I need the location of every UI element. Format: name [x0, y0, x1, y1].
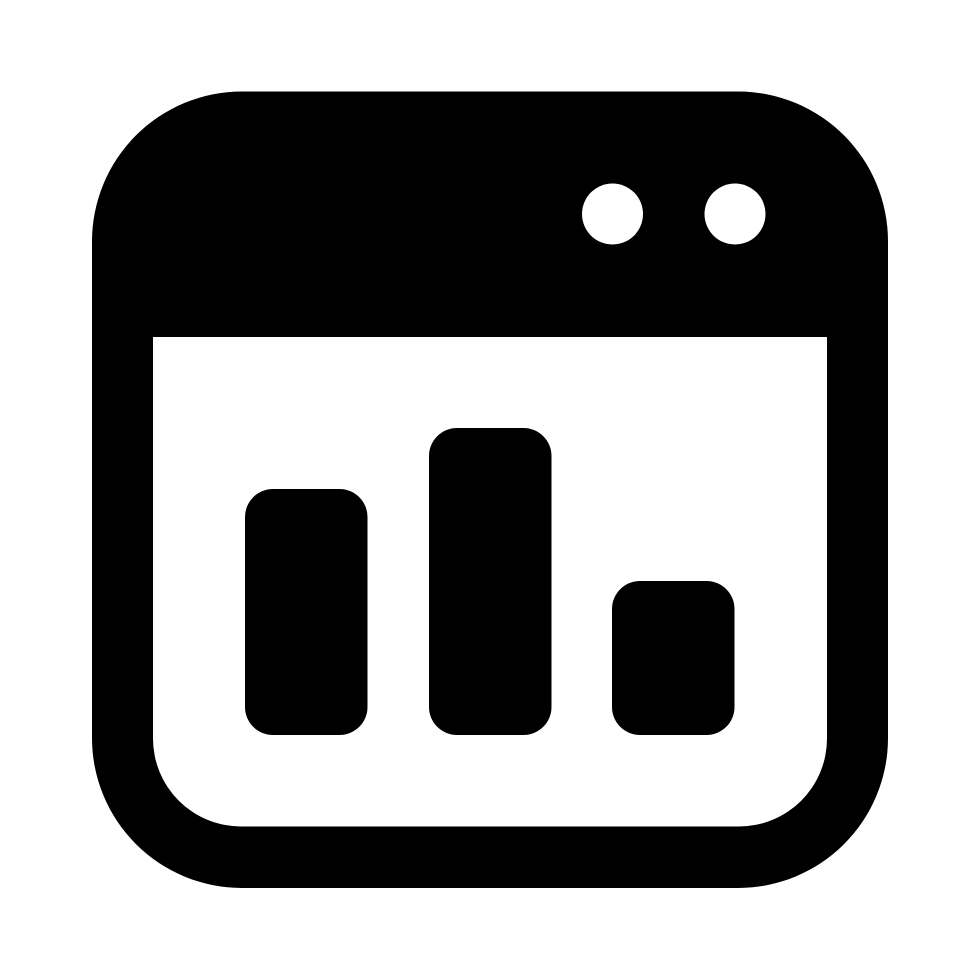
window control dots	[582, 184, 766, 244]
window body	[92, 92, 888, 888]
bar chart	[245, 428, 734, 735]
